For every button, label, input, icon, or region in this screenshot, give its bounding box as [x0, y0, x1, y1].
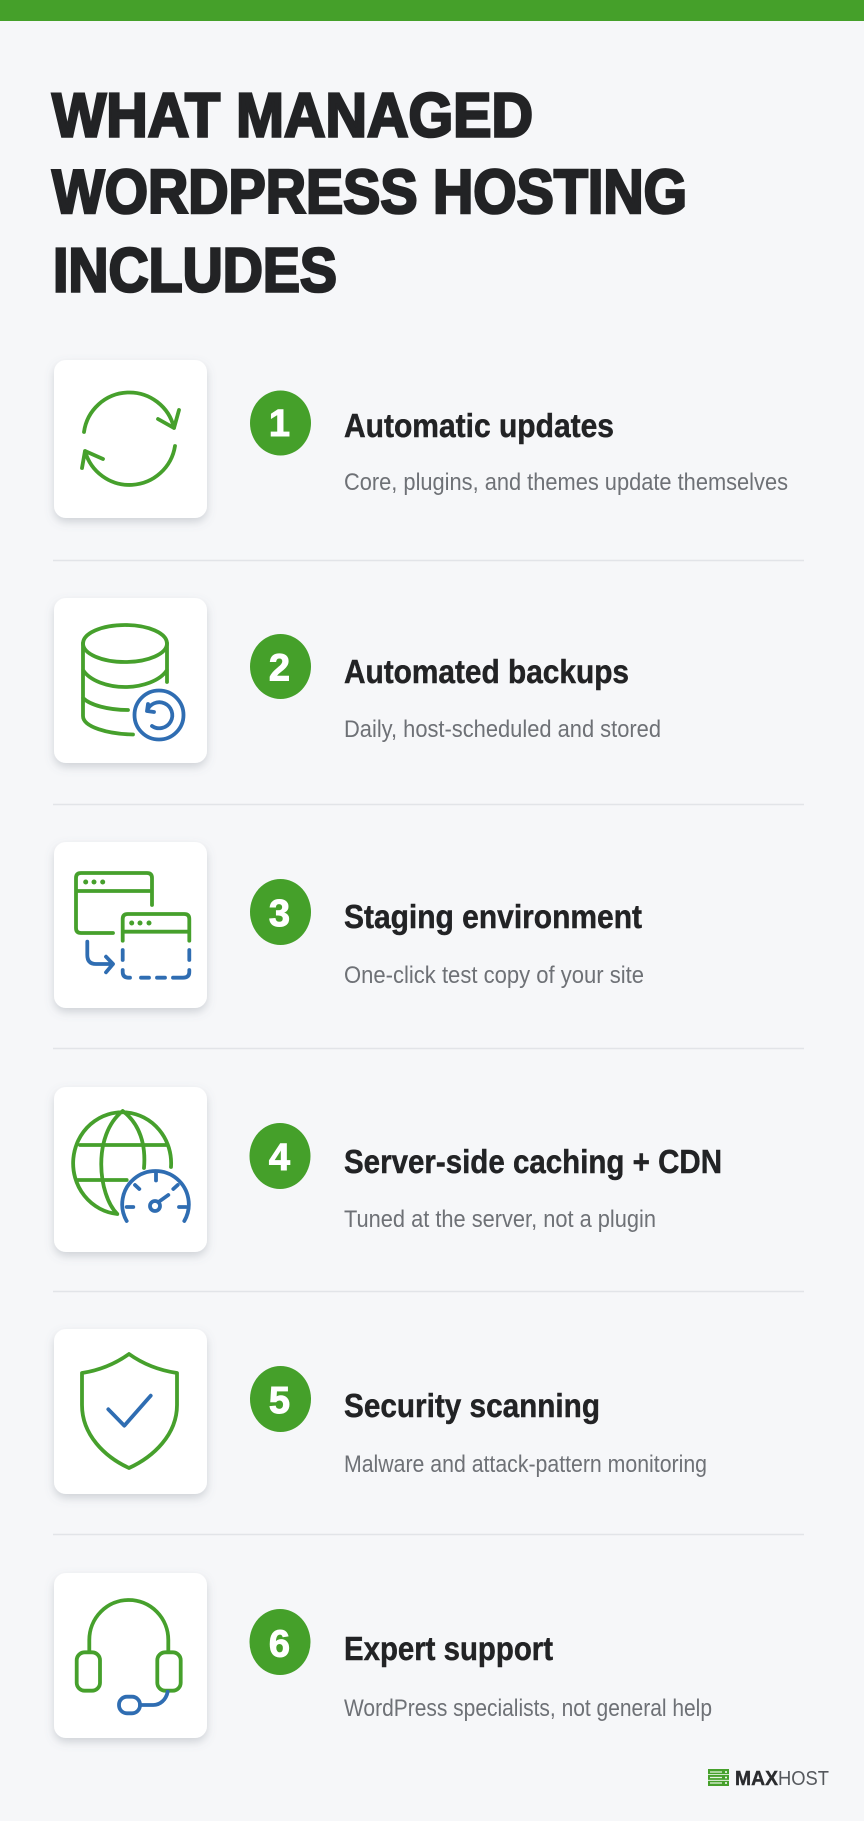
icon card: staging windows	[54, 842, 207, 1008]
description: One-click test copy of your site	[344, 962, 644, 989]
description: Tuned at the server, not a plugin	[344, 1206, 656, 1233]
number badge 1	[250, 390, 311, 456]
number badge 1: 1	[269, 403, 290, 445]
wordmark: HOST	[778, 1768, 829, 1790]
item 3: staging environment	[54, 842, 644, 1008]
icon card: shield with check	[54, 1329, 207, 1494]
number badge 3	[250, 879, 311, 945]
number badge 6: 6	[269, 1624, 290, 1666]
top green bar	[0, 0, 864, 21]
heading: staging environment: Staging environment	[344, 898, 642, 935]
description: WordPress specialists, not general help	[344, 1695, 712, 1722]
heading: automated backups: Automated backups	[344, 653, 629, 690]
number badge 4: 4	[269, 1137, 290, 1179]
item 5: security scanning	[54, 1329, 707, 1494]
title: WORDPRESS HOSTING	[52, 158, 687, 227]
icon card: globe with gauge	[54, 1087, 207, 1252]
number badge 2	[250, 634, 311, 699]
item 1: automatic updates	[54, 360, 788, 518]
title: WHAT MANAGED	[52, 82, 533, 150]
number badge 5	[250, 1366, 311, 1432]
description: Malware and attack-pattern monitoring	[344, 1451, 707, 1478]
heading: expert support: Expert support	[344, 1630, 553, 1667]
number badge 5: 5	[269, 1380, 290, 1422]
icon card: refresh arrows	[54, 360, 207, 518]
heading: automatic updates: Automatic updates	[344, 407, 614, 444]
description: Daily, host-scheduled and stored	[344, 716, 661, 743]
logo: MaxHost	[708, 1768, 829, 1790]
description: Core, plugins, and themes update themselves	[344, 469, 788, 496]
icon card: headset	[54, 1573, 207, 1738]
number badge 2: 2	[269, 648, 290, 690]
item 6: expert support	[54, 1573, 712, 1738]
icon: server stack	[708, 1769, 729, 1786]
item 2: automated backups	[54, 598, 661, 763]
wordmark: MAX	[735, 1768, 779, 1790]
title	[52, 82, 687, 306]
number badge 6	[250, 1609, 310, 1675]
heading: server-side caching + CDN: Server-side caching + CDN	[344, 1143, 722, 1180]
item 4: server-side caching + CDN	[54, 1087, 722, 1252]
wordmark	[735, 1768, 829, 1790]
title: INCLUDES	[53, 236, 337, 306]
number badge 3: 3	[269, 893, 290, 935]
heading: security scanning: Security scanning	[344, 1387, 600, 1424]
icon card: database with restore	[54, 598, 207, 763]
number badge 4	[250, 1123, 310, 1189]
